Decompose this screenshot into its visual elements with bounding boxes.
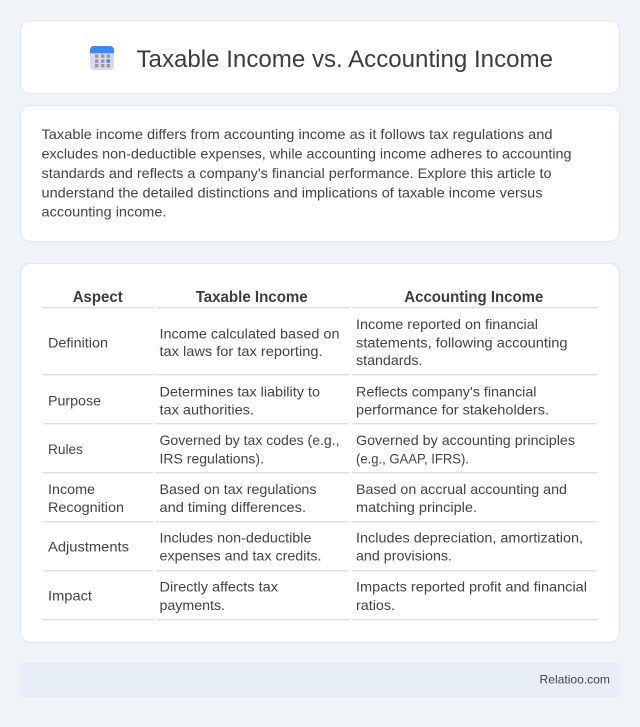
row: Definition: Definition [48, 334, 108, 350]
row: Rules: (e.g., GAAP, IFRS). [356, 450, 469, 466]
row: Rules: IRS regulations). [160, 450, 264, 466]
row: Definition: Income reported on financial [356, 316, 538, 332]
intro text: understand the detailed distinctions and implications of taxable income versus [42, 184, 542, 200]
row: Definition: standards. [356, 352, 422, 368]
table header: Aspect [73, 289, 123, 306]
intro text: accounting income. [42, 204, 166, 220]
row: Rules [48, 432, 575, 466]
row: Purpose [48, 384, 549, 417]
row: Income Recognition: Income [48, 481, 95, 497]
row: Definition: tax laws for tax reporting. [160, 343, 322, 359]
intro text: Taxable income differs from accounting income as it follows tax regulations and [42, 126, 552, 142]
table header: Accounting Income [404, 289, 543, 306]
panel: comparison table [20, 264, 620, 642]
footer [20, 663, 620, 697]
row: Purpose: Determines tax liability to [160, 384, 320, 400]
row: Impact: ratios. [356, 597, 395, 613]
intro text: excludes non-deductible expenses, while accounting income adheres to accounting [42, 145, 572, 161]
row: Income Recognition: Based on tax regulations [160, 481, 316, 497]
row: Impact: Impact [48, 588, 92, 604]
row: Rules: Governed by tax codes (e.g., [160, 432, 340, 448]
row: Purpose: Reflects company's financial [356, 384, 536, 400]
title panel [20, 20, 620, 94]
row: Definition: Income calculated based on [160, 325, 340, 341]
row: Impact [48, 579, 587, 613]
row: Rules: Governed by accounting principles [356, 432, 575, 448]
row: Definition [48, 316, 568, 368]
row: Impact: Impacts reported profit and financial [356, 579, 587, 595]
row: Rules: Rules [48, 441, 83, 457]
row: Adjustments: expenses and tax credits. [160, 548, 322, 564]
table header: Taxable Income [196, 289, 308, 306]
row: Adjustments: Adjustments [48, 539, 129, 555]
row: Adjustments: and provisions. [356, 548, 452, 564]
row: Adjustments [48, 530, 583, 564]
table header [73, 289, 543, 306]
row: Income Recognition: Based on accrual accounting and [356, 481, 567, 497]
row: Impact: Directly affects tax [160, 579, 278, 595]
footer text: Relatioo.com [540, 672, 610, 686]
row: Adjustments: Includes depreciation, amortization, [356, 530, 583, 546]
row: Purpose: Purpose [48, 392, 101, 408]
row: Purpose: performance for stakeholders. [356, 401, 549, 417]
row: Definition: statements, following accounting [356, 334, 568, 350]
intro text: standards and reflects a company's financial performance. Explore this article to [42, 165, 552, 181]
row: Purpose: tax authorities. [160, 401, 254, 417]
panel: introduction [20, 106, 620, 242]
row: Impact: payments. [160, 597, 225, 613]
row: Income Recognition: matching principle. [356, 499, 477, 515]
row: Adjustments: Includes non-deductible [160, 530, 312, 546]
title: Taxable Income vs. Accounting Income [136, 46, 553, 73]
row: Income Recognition [48, 481, 567, 515]
icon: calendar [90, 46, 114, 70]
intro text [42, 126, 572, 220]
row: Income Recognition: Recognition [48, 499, 124, 515]
row: Income Recognition: and timing differences. [160, 499, 306, 515]
